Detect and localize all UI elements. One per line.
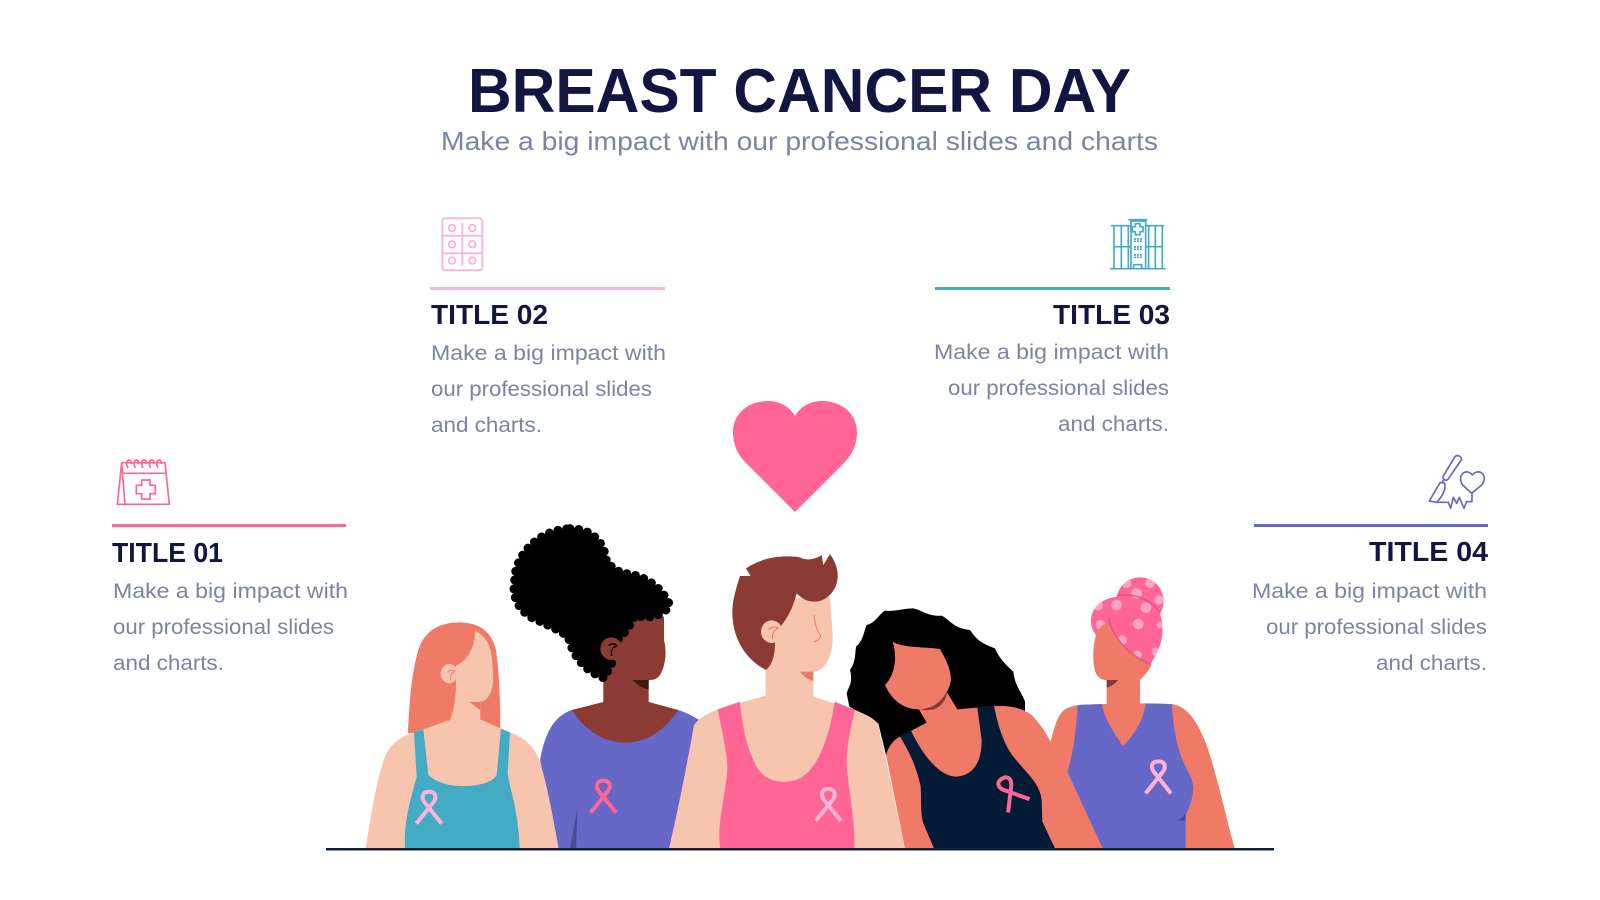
figure: man with brown hair (669, 554, 905, 848)
panel: title 02 (430, 218, 666, 437)
ribbon (1146, 761, 1171, 793)
figure: woman with long red hair (366, 622, 559, 848)
heading: TITLE 01 (112, 537, 223, 568)
heading: TITLE 02 (431, 299, 548, 330)
body text: our professional slides (948, 377, 1169, 400)
divider line (430, 287, 665, 290)
body text: Make a big impact with (1252, 580, 1487, 603)
illustration: group of five women (366, 529, 1235, 848)
body text: our professional slides (113, 616, 334, 639)
body text (431, 342, 666, 437)
body text: and charts. (431, 414, 542, 437)
panel: title 04 (1252, 456, 1489, 675)
icon: calendar with medical cross (117, 460, 169, 504)
body text (934, 341, 1169, 436)
body text: Make a big impact with (934, 341, 1169, 364)
body text: Make a big impact with (431, 342, 666, 365)
body text: Make a big impact with (113, 580, 348, 603)
body text: and charts. (113, 652, 224, 675)
heading: TITLE 04 (1369, 536, 1489, 567)
body text (113, 580, 348, 675)
title: BREAST CANCER DAY (468, 57, 1131, 126)
divider line (1254, 524, 1488, 527)
icon: pill blister pack (442, 218, 482, 270)
infographic canvas (112, 68, 1488, 850)
body text: and charts. (1058, 413, 1169, 436)
divider line (112, 524, 346, 527)
body text: and charts. (1376, 652, 1487, 675)
panel: title 03 (934, 220, 1170, 436)
icon: pink heart (733, 401, 857, 512)
heading: TITLE 03 (1053, 299, 1170, 330)
ribbon (816, 789, 841, 821)
body text (1252, 580, 1487, 675)
icon: hospital building (1110, 220, 1166, 269)
body text: our professional slides (1266, 616, 1487, 639)
divider line (935, 287, 1170, 290)
ribbon (591, 781, 616, 813)
ground line (326, 848, 1274, 850)
ribbon (416, 792, 442, 824)
figure: woman with afro bun (514, 529, 720, 848)
ribbon (991, 772, 1030, 813)
figure: woman with black wavy hair (847, 608, 1103, 848)
panel: title 01 (112, 460, 348, 675)
icon: scalpel and heart (1429, 456, 1484, 508)
subtitle: Make a big impact with our professional slides and charts (441, 126, 1158, 156)
figure: woman with polka dot towel (1051, 577, 1235, 848)
body text: our professional slides (431, 378, 652, 401)
